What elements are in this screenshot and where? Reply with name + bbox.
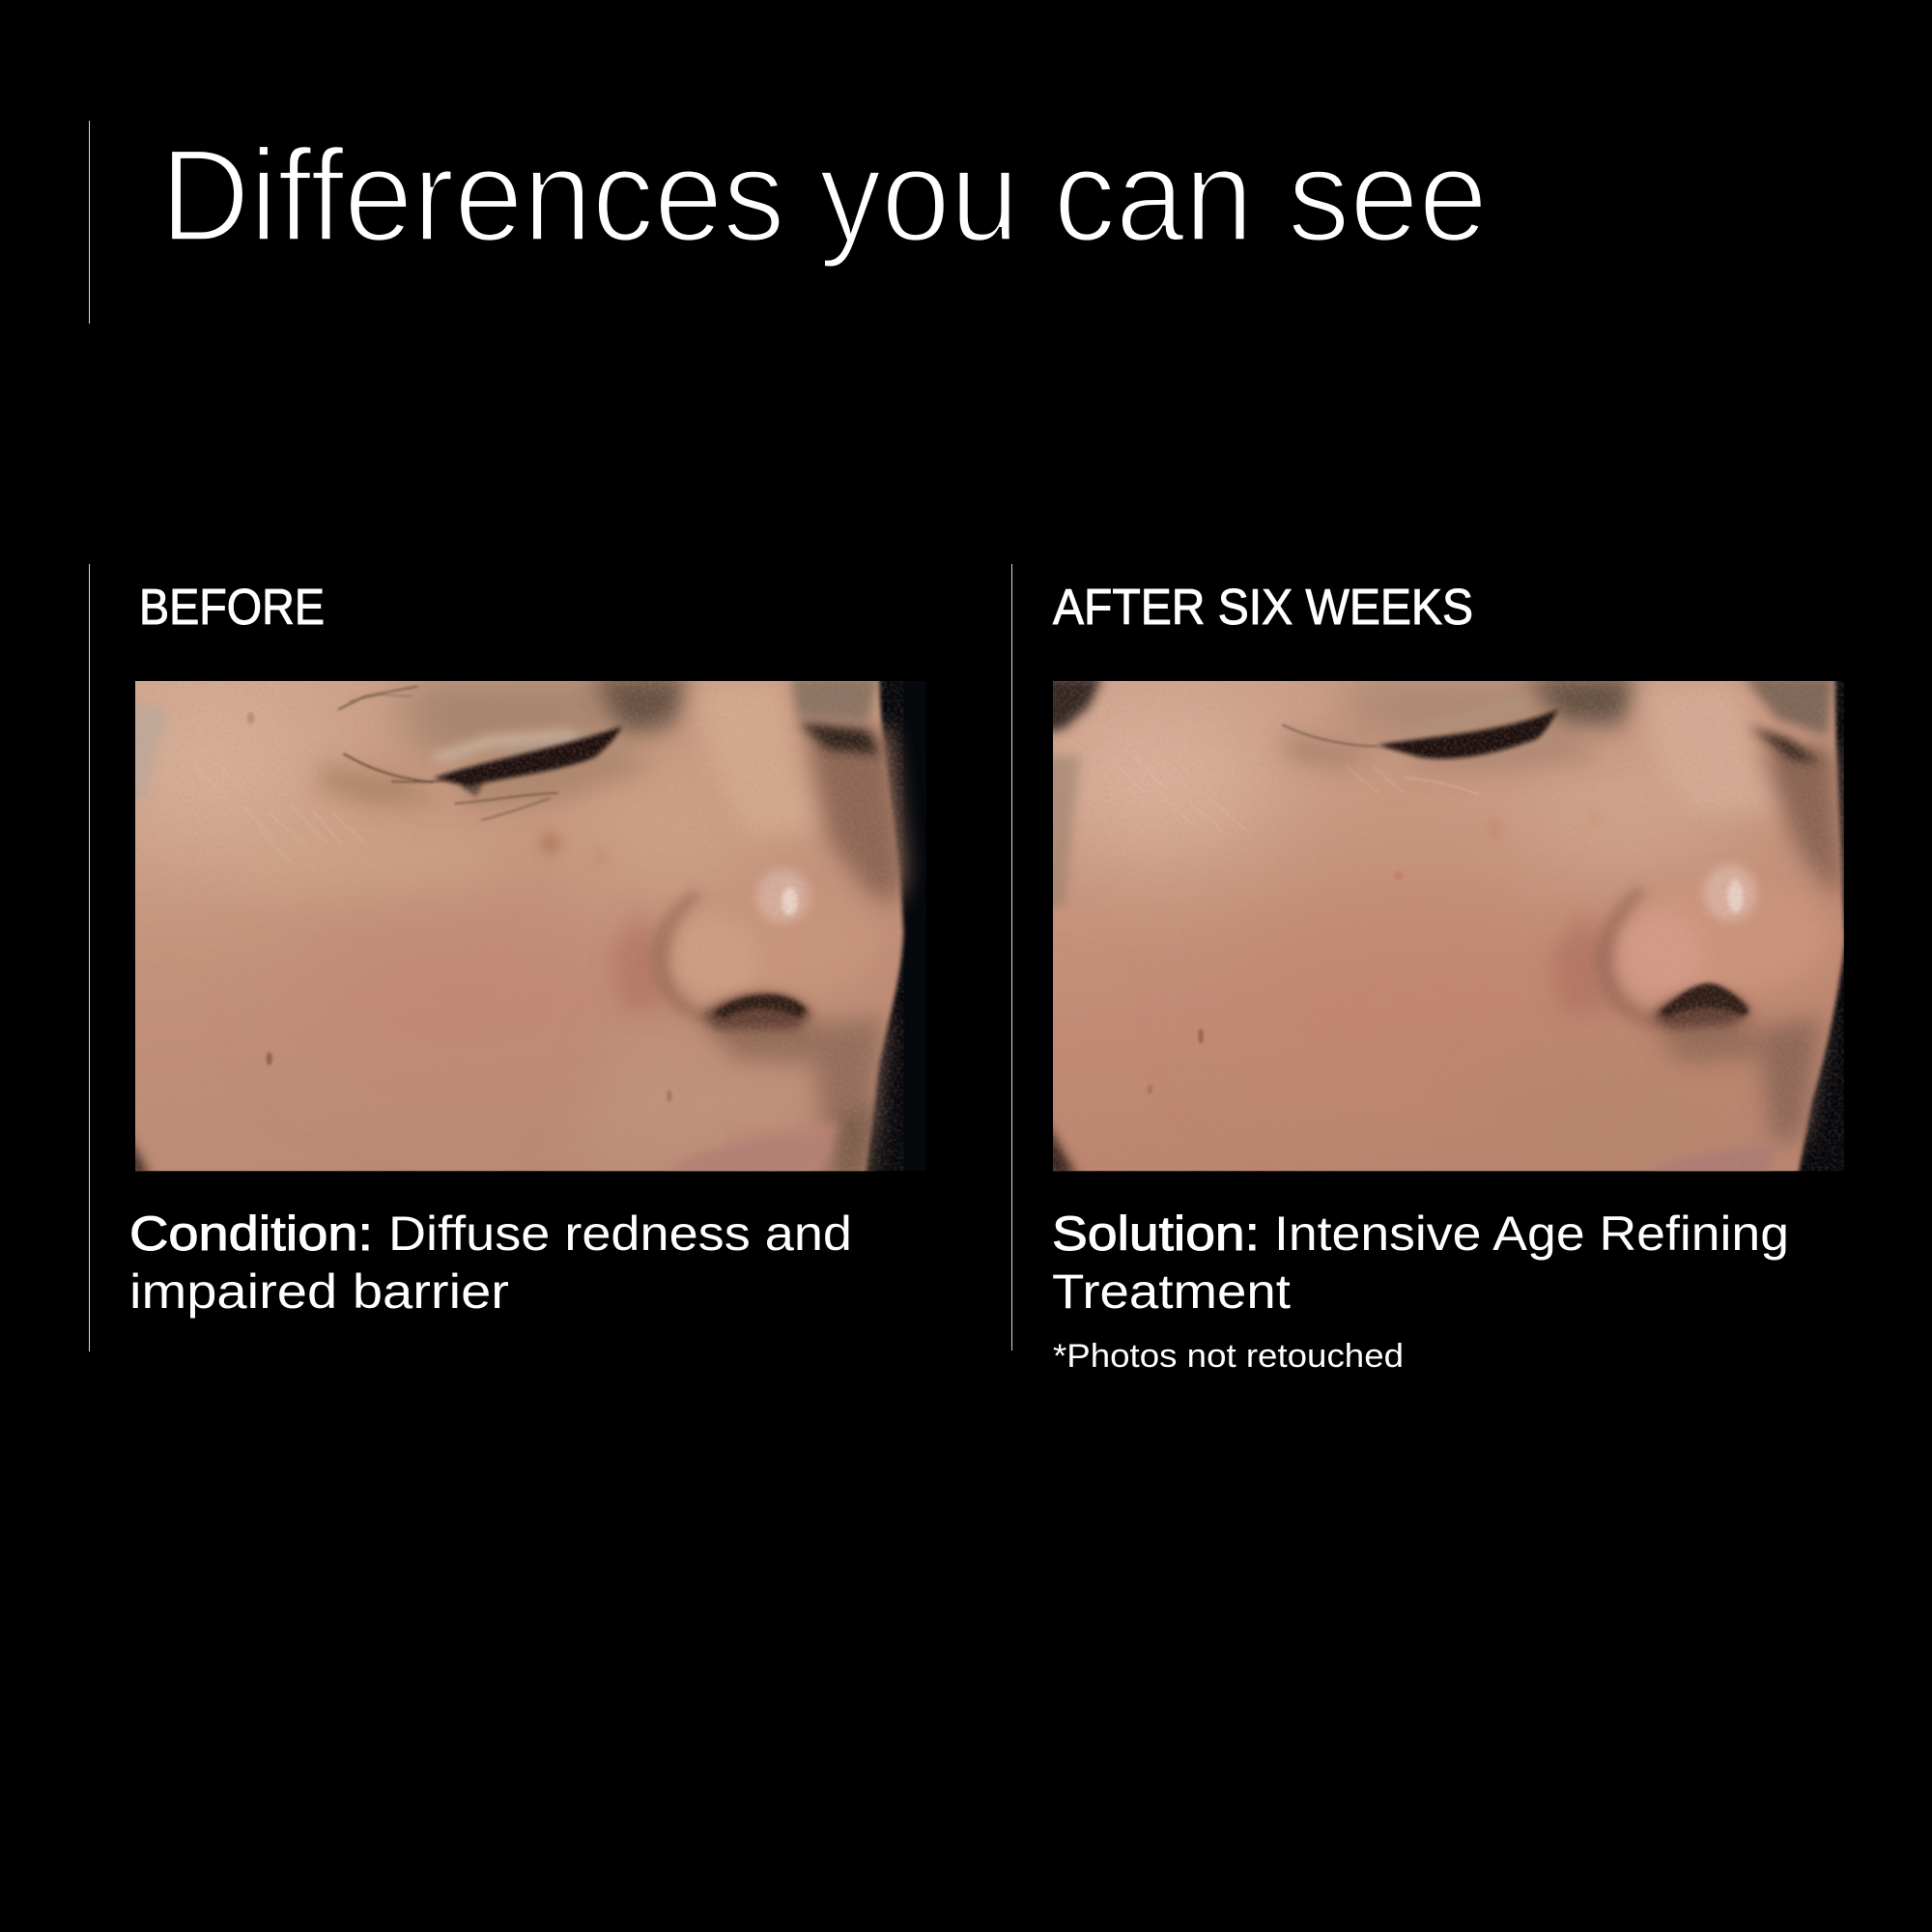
- cheek to nose crease: [1549, 910, 1608, 1016]
- title: Differences you can see: [160, 122, 1488, 269]
- caption: solution: Treatment: [1052, 1264, 1291, 1319]
- nostril shade: [1651, 990, 1751, 1030]
- photo: face before treatment: [135, 681, 925, 1171]
- lip: [1642, 1143, 1776, 1176]
- title accent rule: [89, 121, 90, 324]
- faint lines on temple: [1113, 756, 1405, 833]
- panel rule: after: [1011, 564, 1012, 1350]
- upper lid: [1405, 695, 1531, 736]
- lip: [667, 1127, 837, 1176]
- brow hollow: [1341, 676, 1633, 740]
- eyelash: [1378, 710, 1558, 758]
- nostril: [1661, 983, 1748, 1017]
- faint lines on temple: [195, 763, 365, 863]
- far eye: [1744, 676, 1833, 736]
- lighter face below nose: [569, 1113, 681, 1171]
- far cheek shade: [805, 729, 905, 906]
- cheek to nose crease: [611, 914, 661, 1013]
- tone and skin texture: [135, 681, 903, 1171]
- heading: after six weeks: AFTER SIX WEEKS: [1053, 580, 1473, 636]
- caption: condition: impaired barrier: [129, 1264, 509, 1319]
- lower lip shadow: [826, 1106, 879, 1186]
- nostril shade: [701, 993, 812, 1030]
- panel: after six weeks: [980, 564, 1845, 1375]
- tan band under the eye: [337, 846, 463, 881]
- photo: face after treatment: [980, 633, 1845, 1200]
- nostril: [713, 995, 807, 1018]
- far cheek shade: [1759, 747, 1844, 899]
- nose shine: [781, 887, 798, 915]
- nose shine glow: [1704, 865, 1756, 922]
- nose shine glow: [756, 869, 810, 923]
- nose edge: [1594, 886, 1669, 1031]
- broad light and shade: [1034, 699, 1754, 1099]
- panel: before: [63, 564, 926, 1351]
- upper lid: [428, 729, 582, 763]
- caption: condition: [129, 1207, 852, 1319]
- freckle: [1488, 819, 1500, 839]
- caption: condition: Condition:: [129, 1207, 373, 1261]
- caption: solution: Solution:: [1052, 1207, 1260, 1261]
- skin marks: [266, 1052, 272, 1065]
- tone and skin texture: [1053, 681, 1844, 1171]
- brow hollow: [402, 676, 688, 759]
- under-nose and lip shade: [1653, 1016, 1754, 1063]
- broad light and shade: [135, 682, 716, 875]
- nose tip: [1627, 880, 1828, 993]
- caption: solution: Intensive Age Refining: [1274, 1207, 1789, 1261]
- freckle cluster: [538, 832, 562, 854]
- nose shine: [1727, 880, 1744, 913]
- caption: solution: [1052, 1207, 1789, 1319]
- panel rule: before: [89, 564, 90, 1351]
- temple hair: [127, 703, 169, 803]
- cool lower right: [1478, 1049, 1712, 1163]
- nose bridge highlight: [694, 683, 815, 833]
- caption: condition: Diffuse redness and: [388, 1207, 852, 1261]
- skin marks: [1198, 1029, 1204, 1043]
- lid and crow's feet: [1283, 724, 1378, 747]
- under-nose and lip shade: [698, 1016, 815, 1063]
- heading: before: BEFORE: [139, 580, 325, 636]
- nose bridge highlight: [1642, 683, 1776, 813]
- temple hair: [1044, 676, 1102, 731]
- nose edge: [648, 889, 704, 1022]
- nose tip: [769, 960, 784, 980]
- far eye brow skin: [791, 676, 879, 723]
- crow's feet: [344, 753, 434, 782]
- eyelash: [434, 726, 622, 786]
- footnote: *Photos not retouched: [1053, 1338, 1404, 1375]
